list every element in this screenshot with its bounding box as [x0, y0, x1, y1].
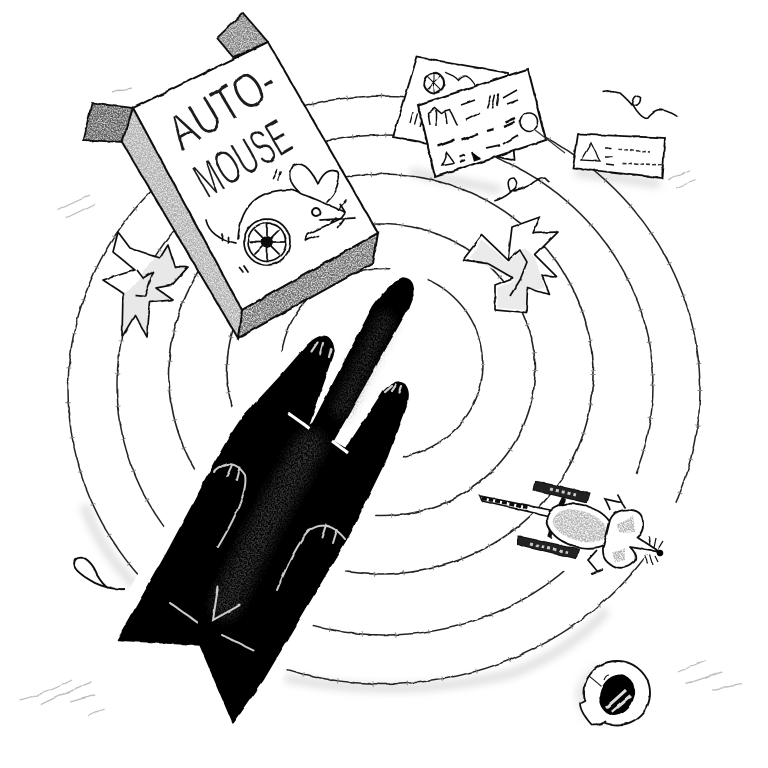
cereal-style box: AUTO-MOUSE — [83, 13, 378, 338]
front paw outline: left — [214, 464, 245, 547]
rug: concentric rings — [68, 96, 700, 684]
cat whiskers and nose — [170, 587, 253, 650]
back paper — [393, 57, 515, 160]
coffee cup — [576, 661, 650, 725]
crumpled paper: right — [463, 217, 558, 313]
box mouse illustration — [206, 164, 355, 272]
paw fur texture — [225, 320, 385, 605]
box title: AUTO- — [158, 53, 286, 160]
front paw outline: right — [277, 525, 345, 590]
squiggle: top right — [603, 91, 678, 118]
white document sheets — [393, 57, 665, 178]
box flap: left — [83, 103, 133, 142]
robotic mouse — [480, 481, 663, 574]
mouse legs — [588, 494, 625, 574]
ring 3 — [169, 174, 593, 574]
white clearing around the mouse — [527, 470, 684, 586]
warning card — [573, 134, 665, 178]
box side: left — [122, 108, 242, 338]
mouse head — [603, 510, 663, 568]
cat paws — [118, 278, 413, 723]
box side: bottom — [238, 233, 378, 338]
box title: MOUSE — [184, 109, 301, 209]
ring 1 — [68, 96, 700, 684]
water drop outline — [74, 558, 125, 589]
claws and toes — [170, 342, 401, 650]
box flap: top — [217, 13, 268, 57]
front paper — [418, 69, 565, 177]
mouse wheels — [518, 481, 590, 559]
box title — [158, 53, 301, 209]
motion strokes — [20, 88, 742, 716]
ring 2 — [117, 135, 653, 635]
slot end marks — [288, 413, 348, 453]
box front face — [133, 42, 378, 310]
mouse body — [542, 496, 618, 556]
white halo around the cat paws — [118, 280, 413, 723]
squiggle: middle — [494, 178, 549, 201]
ring 5 — [281, 269, 483, 459]
ring 4 — [227, 224, 535, 516]
black paw silhouette — [118, 278, 413, 723]
rug shadow — [84, 172, 660, 688]
mouse tail — [480, 496, 550, 516]
crumpled paper: left — [103, 232, 188, 337]
